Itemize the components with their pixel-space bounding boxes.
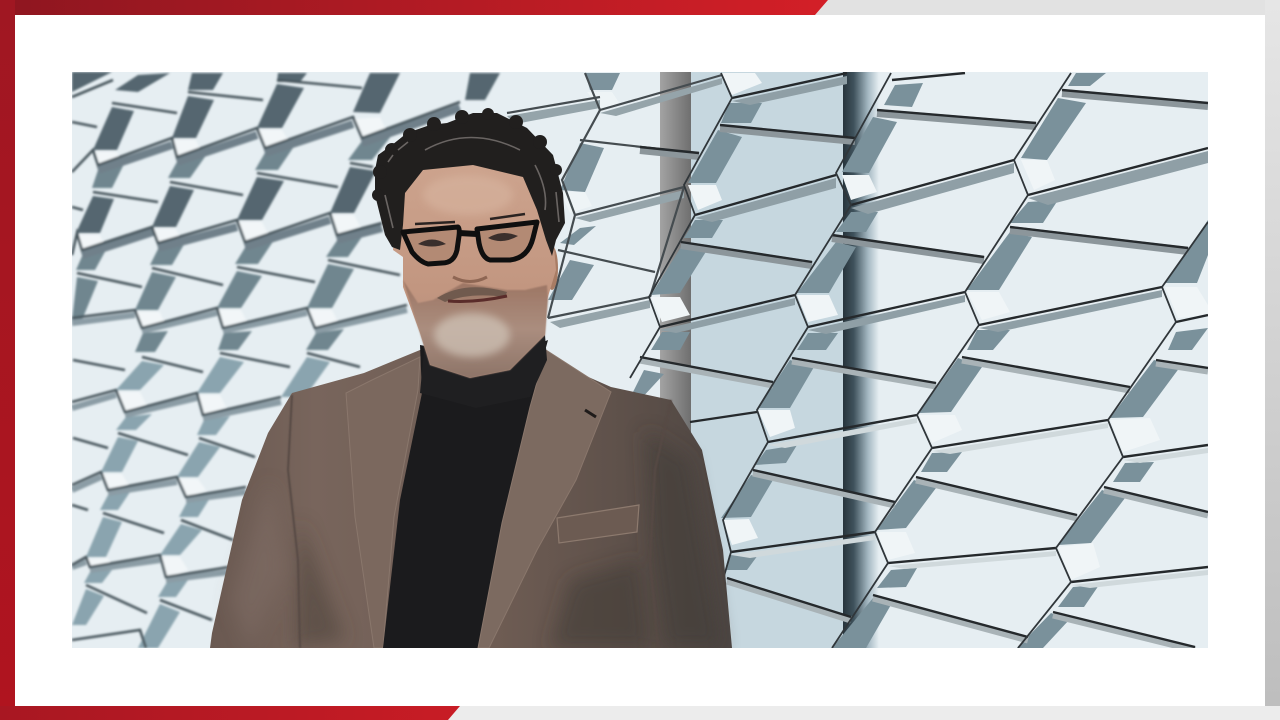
grey bands under struts bbox=[660, 76, 1208, 334]
left lapel bbox=[346, 357, 420, 648]
beard light centre bbox=[434, 313, 510, 357]
jacket shading bbox=[230, 430, 722, 648]
wall background bbox=[72, 72, 1208, 648]
eyes bbox=[418, 233, 518, 246]
turtleneck bbox=[383, 340, 548, 648]
lattice: cells right of the head bbox=[507, 73, 722, 400]
white corner blocks bbox=[651, 73, 1208, 580]
lattice: small left cells bbox=[72, 72, 500, 648]
forehead highlight bbox=[425, 177, 511, 214]
long diagonals bbox=[630, 73, 1208, 648]
man portrait bbox=[210, 108, 732, 648]
moustache and mouth bbox=[437, 287, 507, 302]
photo panel bbox=[72, 72, 1208, 650]
eyebrows bbox=[415, 214, 525, 224]
lattice: large right cells bbox=[630, 73, 1208, 650]
right lapel bbox=[478, 350, 611, 648]
lapel notch bbox=[585, 410, 596, 417]
flanges bbox=[651, 73, 1208, 648]
struts bbox=[660, 73, 1208, 582]
breast pocket bbox=[557, 505, 639, 543]
face bbox=[393, 158, 556, 378]
jacket bbox=[210, 345, 732, 648]
hair curls bbox=[372, 108, 562, 201]
neck bbox=[420, 335, 547, 394]
hair bbox=[375, 113, 565, 256]
bridge of glasses bbox=[459, 233, 477, 234]
glasses bbox=[403, 222, 537, 264]
crossbars bbox=[640, 93, 1208, 265]
sleeve seams bbox=[288, 395, 671, 648]
ear bbox=[550, 248, 558, 290]
beard bbox=[403, 280, 548, 378]
hair highlights bbox=[385, 138, 559, 228]
nose shadow bbox=[453, 277, 487, 282]
